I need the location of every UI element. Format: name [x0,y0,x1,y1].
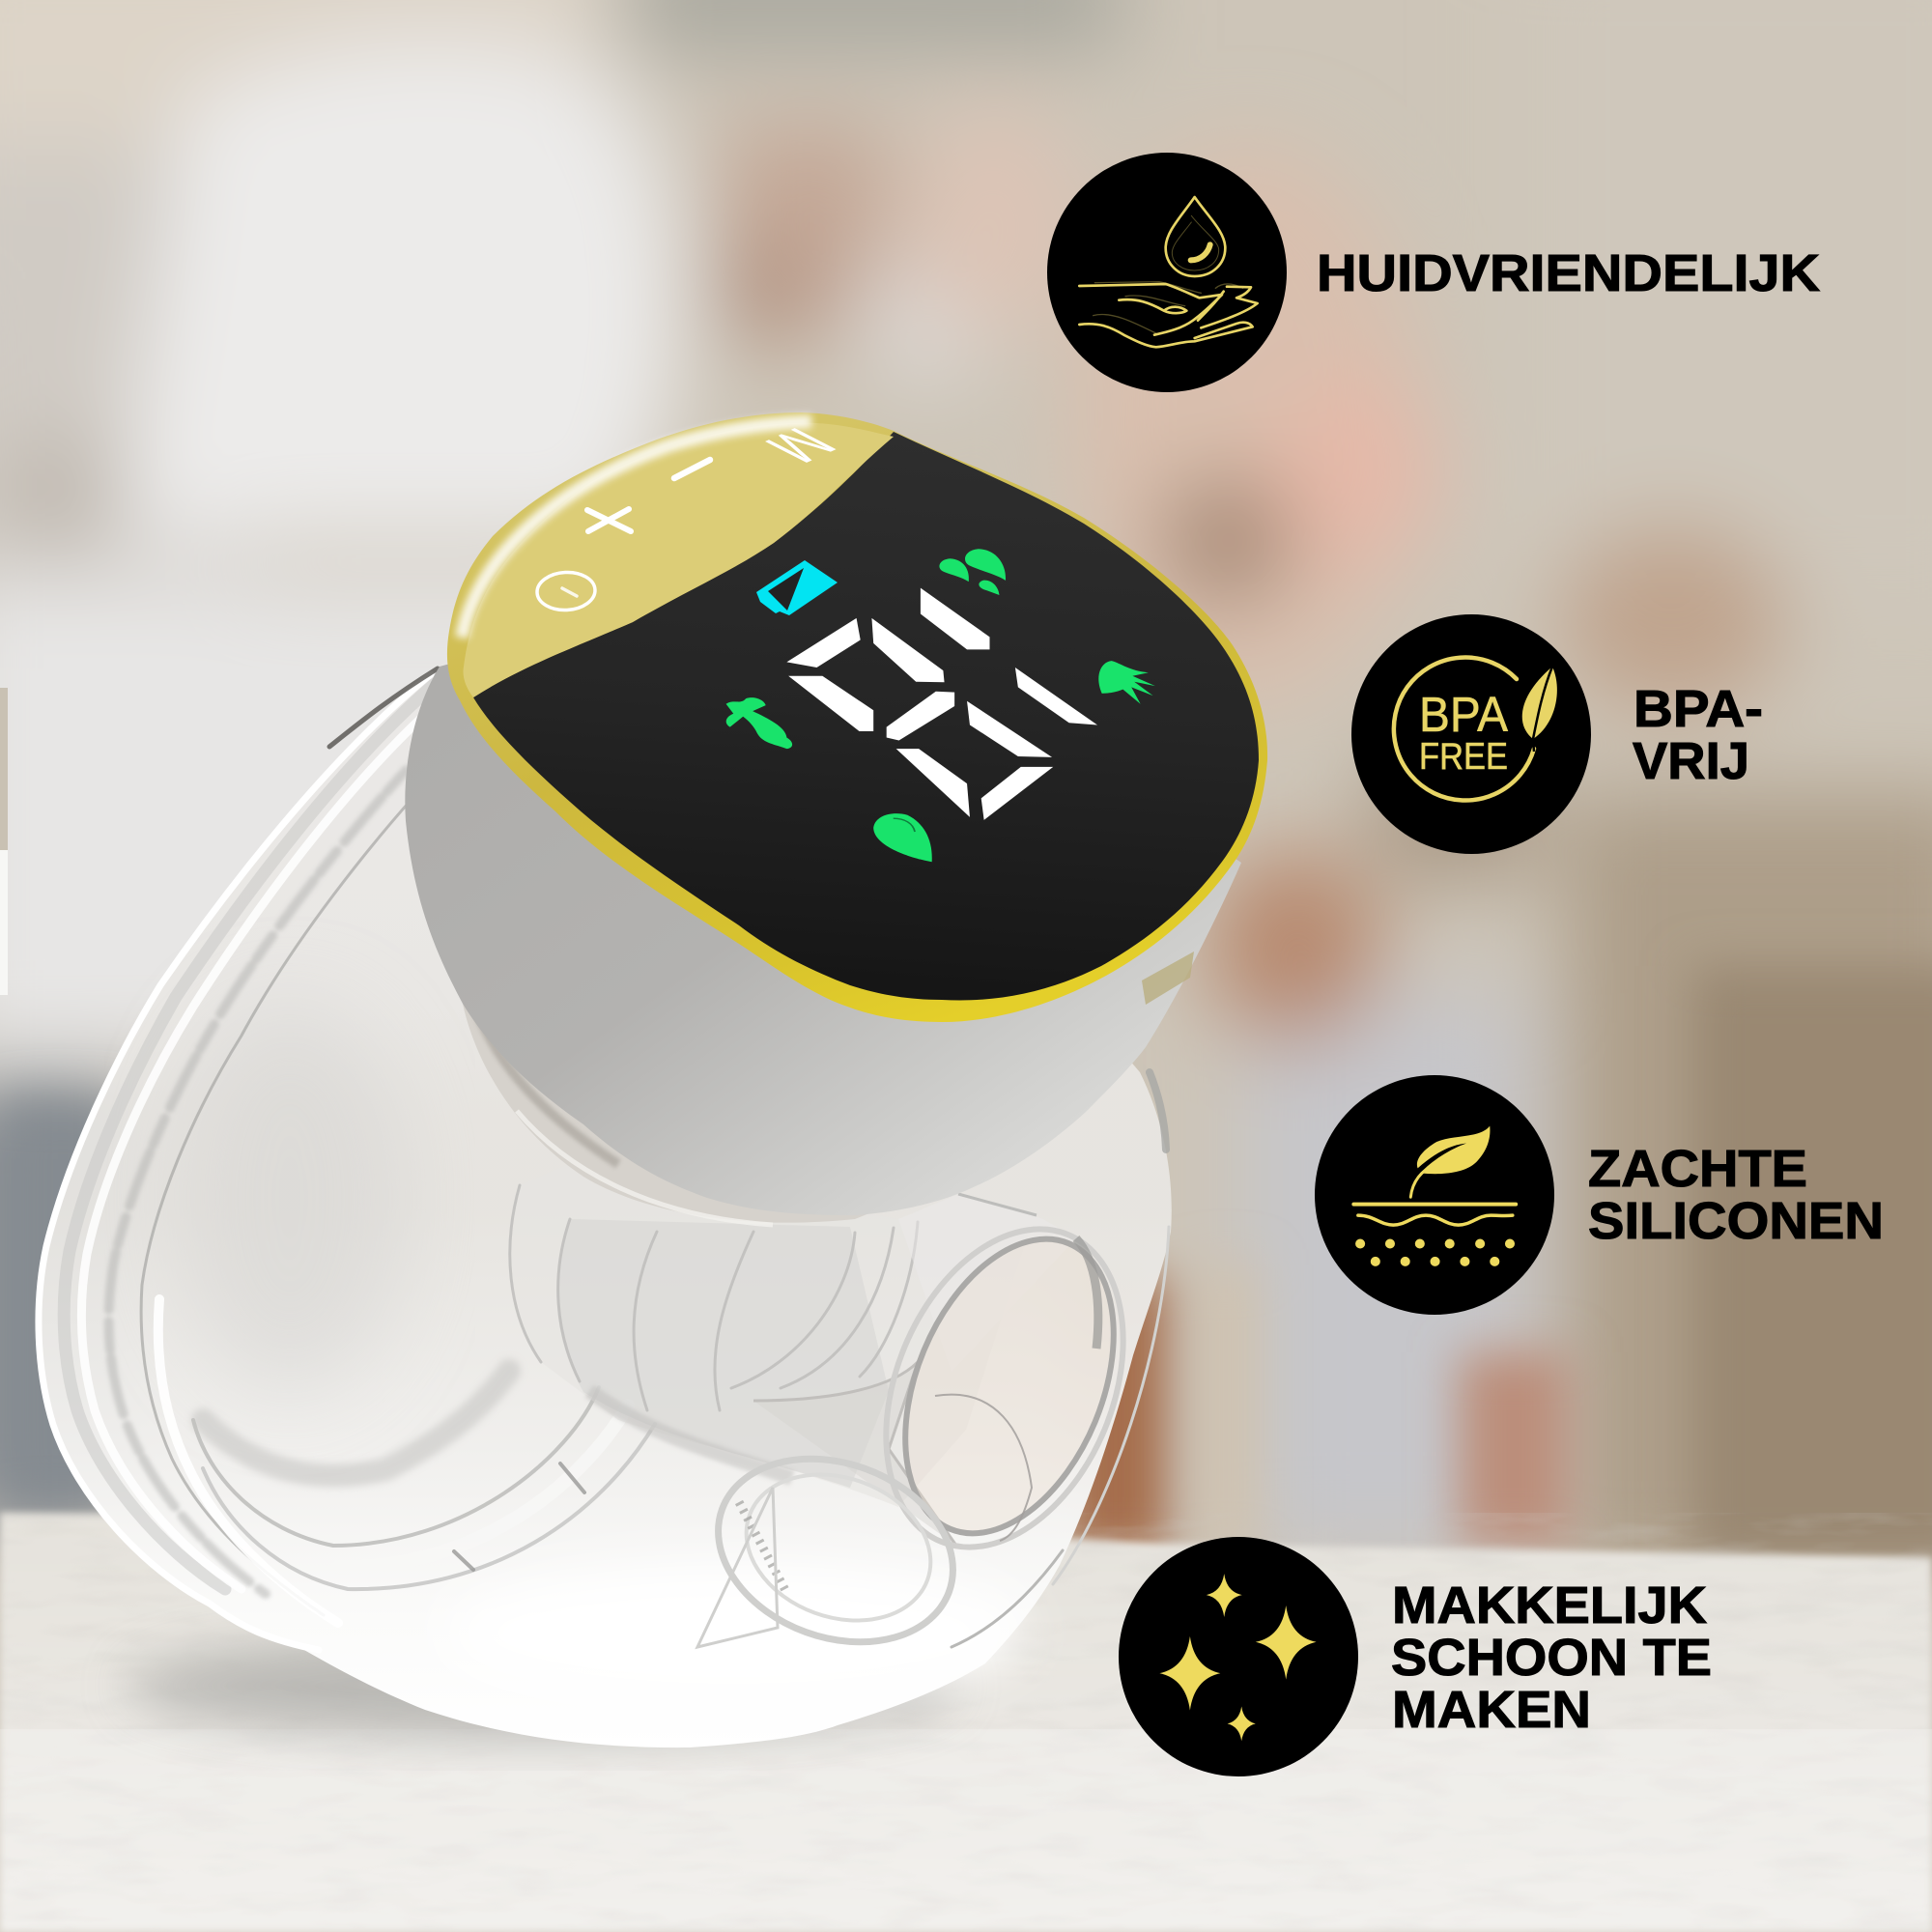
icon: BPA free badge: FREE [1419,736,1508,778]
icon: BPA free badge [1351,614,1591,854]
feature 3: zachte siliconen [1315,1075,1884,1315]
icon: battery [756,560,838,615]
seven-segment display [786,588,1097,820]
label: VRIJ [1633,732,1749,790]
grey motor housing [405,628,1241,1215]
icon: hand with skin drop [1047,153,1287,392]
label: MAKKELIJK [1392,1577,1707,1634]
panel buttons [536,460,710,611]
icon: bottle [726,697,792,749]
icon: hand [1098,661,1155,704]
feature 4: makkelijk schoon te maken [1119,1537,1712,1776]
label: ZACHTE [1588,1140,1807,1198]
icon: large drop [873,813,932,862]
shell rim bands [39,668,464,1650]
feature 2: bpa-vrij [1351,614,1763,854]
feature 1: huidvriendelijk [1047,153,1820,392]
lower collection ring [693,1428,979,1673]
icon: leaf over soft layers [1315,1075,1554,1315]
flange ring [841,1193,1168,1583]
icon: drops [939,549,1006,595]
panel status icons [726,549,1155,862]
product: wearable breast pump [39,412,1267,1747]
icon: sparkles [1119,1537,1358,1776]
panel label M: M [749,420,853,470]
bellows tube and neck [510,1159,1076,1546]
breast shell with transparent body [39,674,1172,1747]
label: BPA- [1634,680,1763,738]
label: HUIDVRIENDELIJK [1317,244,1820,302]
neck thread [463,985,908,1225]
label: MAKEN [1392,1681,1591,1739]
label: SILICONEN [1588,1192,1884,1250]
label: SCHOON TE [1391,1629,1712,1687]
icon: BPA free badge: BPA [1419,687,1508,742]
lower breast ring arcs [193,1072,1169,1647]
control panel with gold rim [447,412,1267,1022]
